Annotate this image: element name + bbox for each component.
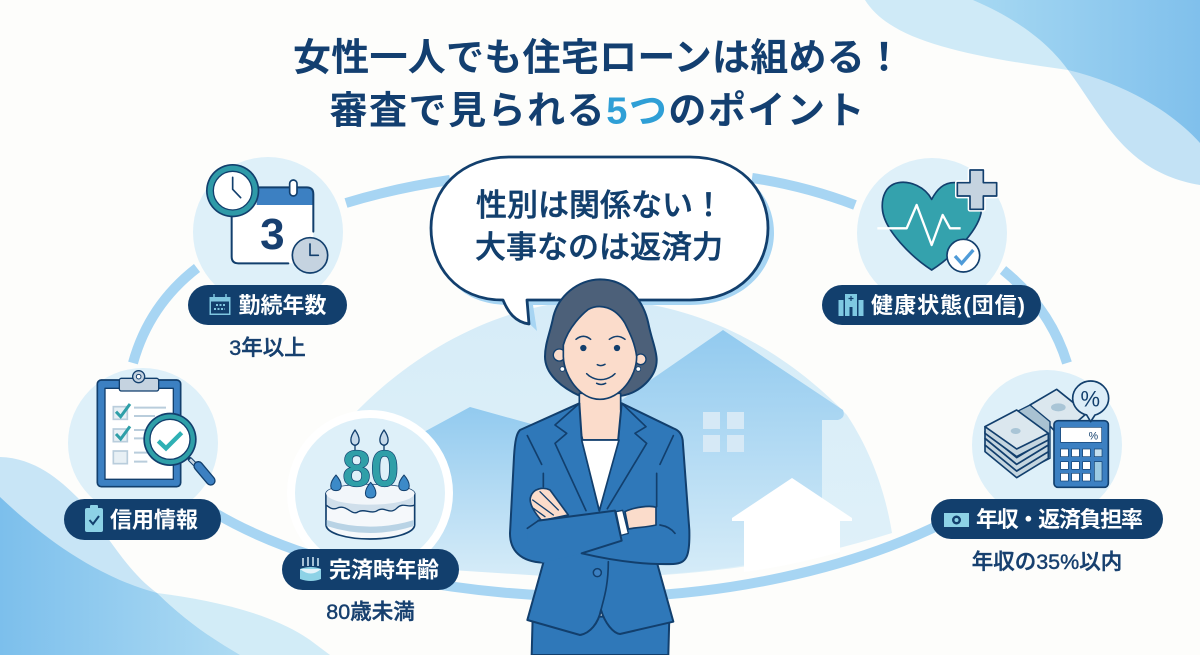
icon: calendar with clocks bbox=[206, 164, 328, 273]
label badge: 完済時年齢 bbox=[282, 549, 459, 590]
icon: birthday cake 80: 80 bbox=[342, 440, 399, 497]
title: 審査で見られる5つのポイント bbox=[330, 90, 864, 132]
icon: mini clipboard bbox=[85, 505, 103, 532]
bubble text: 大事なのは返済力 bbox=[475, 230, 723, 265]
label text: 信用情報 bbox=[110, 508, 198, 532]
point: 健康状態 bbox=[822, 158, 1041, 325]
point: 勤続年数 bbox=[188, 157, 347, 360]
icon: heart with pulse bbox=[877, 170, 997, 272]
label badge: 信用情報 bbox=[64, 499, 221, 540]
icon: calendar with clocks: 3 bbox=[260, 210, 285, 259]
label text: 年収・返済負担率 bbox=[976, 507, 1143, 532]
title bbox=[293, 38, 903, 132]
background wave: bottom left bbox=[0, 457, 330, 655]
label badge: 健康状態 bbox=[822, 285, 1041, 325]
detail text: 80歳未満 bbox=[326, 600, 415, 624]
bubble text: 性別は関係ない！ bbox=[476, 188, 724, 223]
label badge: 勤続年数 bbox=[188, 285, 347, 325]
icon: mini hospital bbox=[838, 294, 864, 316]
label text: 勤続年数 bbox=[238, 293, 327, 318]
woman in blue suit bbox=[510, 279, 689, 655]
label text: 完済時年齢 bbox=[329, 558, 439, 582]
background houses bbox=[420, 330, 852, 577]
label badge: 年収・返済負担率 bbox=[931, 499, 1163, 539]
point: 信用情報 bbox=[64, 368, 221, 540]
icon: money and calculator: % bbox=[1081, 387, 1100, 412]
detail text: 3年以上 bbox=[229, 336, 306, 360]
label text: 健康状態(団信) bbox=[871, 293, 1025, 318]
detail text: 年収の35%以内 bbox=[972, 550, 1122, 574]
icon: mini banknote bbox=[944, 513, 969, 527]
icon: mini cake bbox=[300, 557, 321, 581]
icon: clipboard and magnifier bbox=[97, 371, 211, 487]
icon: mini calendar bbox=[210, 294, 230, 315]
icon: money and calculator: % bbox=[1089, 430, 1099, 442]
speech bubble bbox=[431, 157, 774, 331]
icon: birthday cake 80 bbox=[326, 430, 415, 539]
connecting ring bbox=[133, 178, 1067, 597]
point: 年収・返済負担率 bbox=[931, 370, 1163, 574]
icon: money and calculator bbox=[985, 381, 1109, 487]
background dome bbox=[308, 300, 892, 577]
bubble text bbox=[475, 188, 724, 265]
point: 完済時年齢 bbox=[282, 410, 459, 624]
title: 女性一人でも住宅ローンは組める！ bbox=[293, 38, 903, 80]
background wave: top right bbox=[865, 0, 1200, 185]
